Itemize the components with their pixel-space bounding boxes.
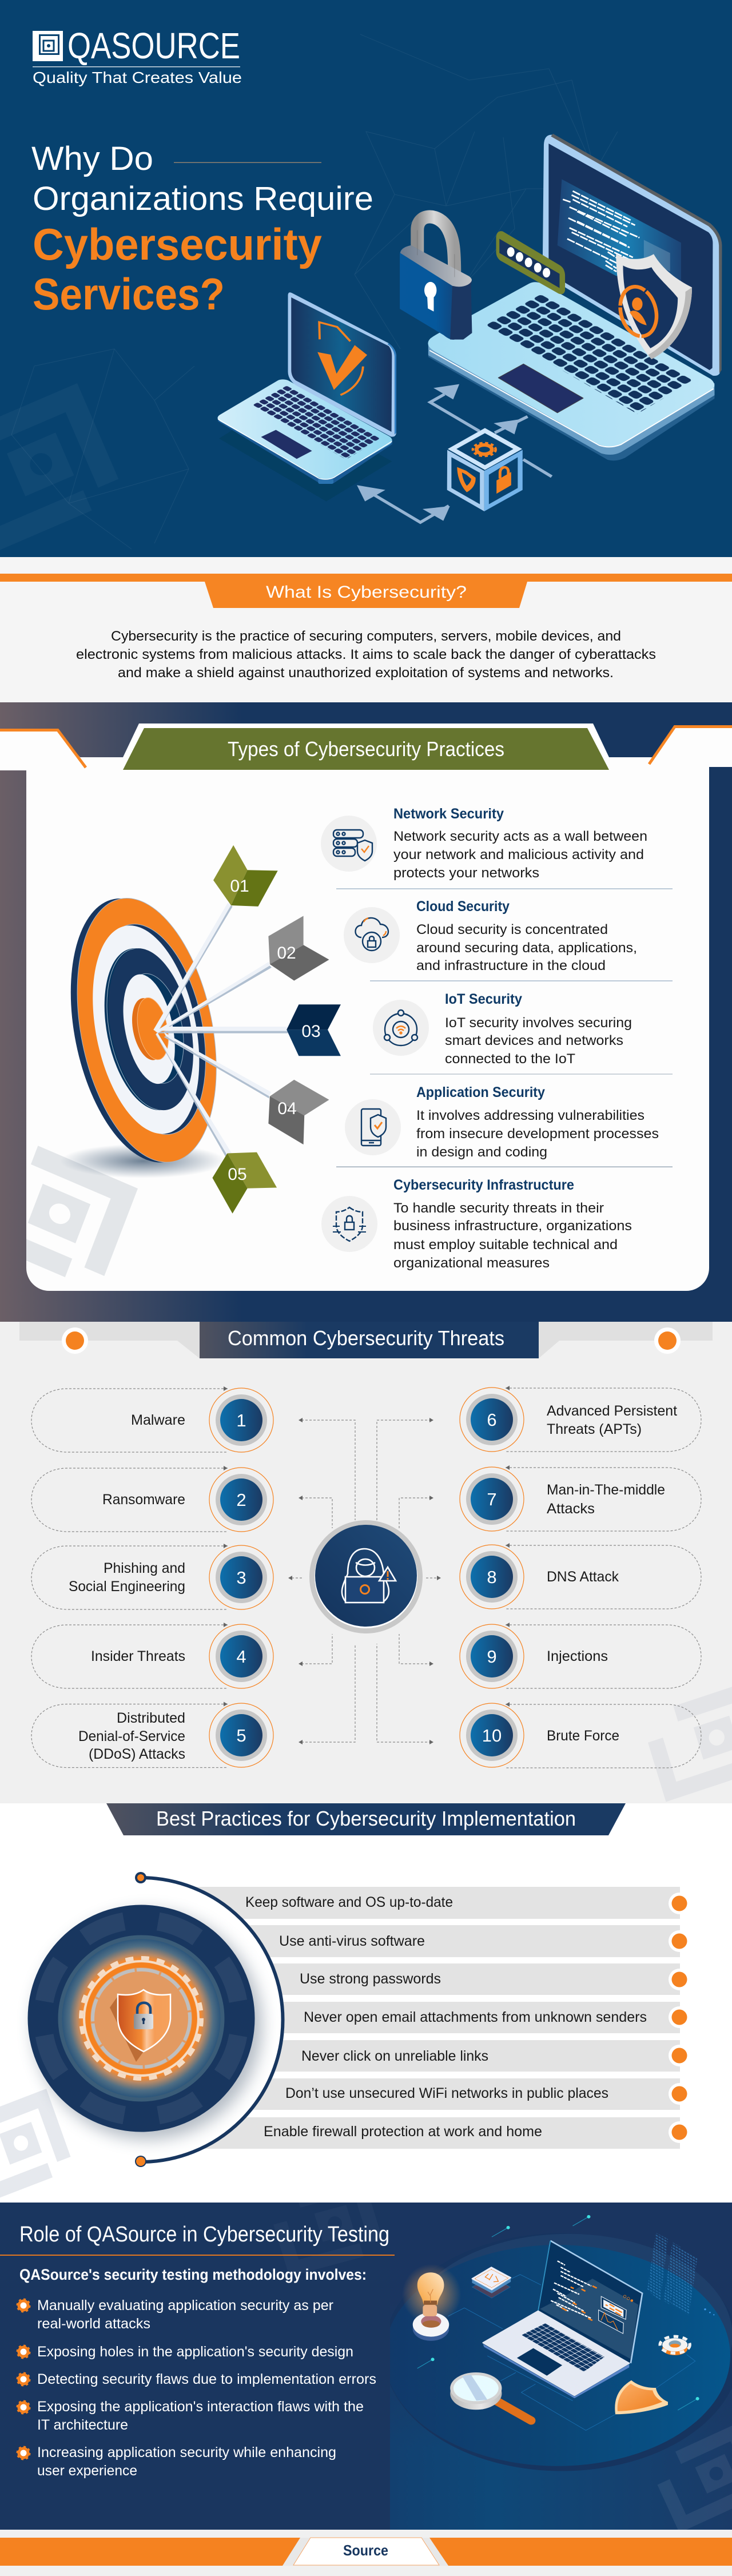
text block: cloud security <box>416 899 637 973</box>
bullet list: user experience <box>37 2463 137 2479</box>
text block: iot security: connected to the IoT <box>445 1051 575 1067</box>
text block: cloud security: Cloud Security <box>416 899 510 915</box>
definition paragraph: electronic systems from malicious attacks. It aims to scale back the danger of cyberattacks <box>76 647 656 662</box>
target shadow <box>60 1144 226 1178</box>
icon: iot security <box>373 1000 429 1056</box>
target graphic <box>50 886 288 1175</box>
light streaks <box>417 2217 698 2410</box>
practice labels: Enable firewall protection at work and home <box>264 2124 542 2140</box>
text block: cybersecurity infrastructure: must employ suitable technical and <box>393 1237 618 1253</box>
orange shield <box>615 2380 668 2414</box>
ribbon left <box>19 1322 200 1358</box>
text block: network security: Network Security <box>393 806 504 822</box>
arrow marker 05 <box>212 1152 277 1214</box>
best practices watermark logo <box>0 2089 71 2197</box>
threat 10: brute force: 10 <box>482 1726 502 1746</box>
panel: best practices <box>0 1803 732 2206</box>
definition paragraph: and make a shield against unauthorized exploitation of systems and networks. <box>118 665 614 681</box>
QASource logo <box>33 25 242 86</box>
arc white disc <box>137 1878 283 2162</box>
text block: network security: Network security acts as a wall between <box>393 829 647 844</box>
threat 5: ddos: (DDoS) Attacks <box>89 1746 185 1762</box>
number 04: 04 <box>277 1099 297 1118</box>
text block: cybersecurity infrastructure <box>393 1177 632 1271</box>
arrow marker 02 <box>268 916 329 981</box>
text block: application security <box>416 1084 659 1160</box>
threats watermark logo <box>648 1687 732 1802</box>
bullet list: IT architecture <box>37 2417 128 2433</box>
hero title: Why Do <box>31 140 153 177</box>
text block: cybersecurity infrastructure: organizational measures <box>393 1255 550 1271</box>
bullet list: real-world attacks <box>37 2316 150 2332</box>
arrow marker 03 <box>287 1004 341 1056</box>
threat 7: mitm: Attacks <box>547 1501 595 1517</box>
bullet list: Increasing application security while enhancing <box>37 2444 336 2460</box>
dot right <box>654 1327 681 1354</box>
heading tab <box>205 582 527 608</box>
footer: source: Source <box>343 2542 388 2559</box>
threat 5: ddos: Denial-of-Service <box>78 1728 185 1744</box>
threat 9: injections: Injections <box>547 1648 608 1664</box>
connector arrowheads <box>288 1418 441 1744</box>
heading tab <box>123 723 609 770</box>
small laptop <box>217 292 396 502</box>
shield emblem <box>27 1905 262 2140</box>
threat 7: mitm <box>460 1465 701 1531</box>
threat 8: dns: 8 <box>487 1567 497 1587</box>
role top shade <box>390 2203 732 2530</box>
hero panel <box>0 0 732 559</box>
hero watermark logo <box>0 383 118 550</box>
threat 7: mitm: 7 <box>487 1489 497 1509</box>
text block: iot security <box>445 991 632 1067</box>
threat 10: brute force <box>460 1702 701 1768</box>
laptop <box>483 2241 642 2398</box>
panel: common cybersecurity threats <box>0 1322 732 1803</box>
threat 2: ransomware: 2 <box>236 1490 246 1510</box>
dashed connectors <box>292 1420 438 1742</box>
panel: what is cybersecurity <box>0 557 732 702</box>
icon: network security <box>321 816 377 872</box>
icon: cloud security <box>344 907 400 963</box>
hero title: Organizations Require <box>33 180 373 217</box>
big laptop and padlock <box>400 134 722 460</box>
text block: cybersecurity infrastructure: Cybersecurity Infrastructure <box>393 1177 574 1193</box>
text block: cloud security: and infrastructure in the cloud <box>416 958 606 973</box>
hero network pattern <box>11 34 618 549</box>
text block: cybersecurity infrastructure: business infrastructure, organizations <box>393 1218 632 1234</box>
threat 6: apts: Advanced Persistent <box>547 1403 677 1419</box>
text block: iot security: IoT security involves securing <box>445 1015 632 1031</box>
threat 10: brute force: Brute Force <box>547 1728 619 1744</box>
globe backdrop <box>383 2233 732 2471</box>
panel: types of cybersecurity practices <box>0 702 732 1322</box>
heading tab: Common Cybersecurity Threats <box>228 1326 504 1350</box>
icon: cybersecurity infrastructure <box>321 1196 377 1252</box>
bullet list: Exposing the application's interaction flaws with the <box>37 2399 364 2415</box>
circular arrows <box>357 384 552 522</box>
small laptop, arrows and cube <box>217 292 552 522</box>
QASource logo: Quality That Creates Value <box>33 69 242 86</box>
threat 3: phishing <box>31 1544 273 1609</box>
password box <box>496 231 565 294</box>
practice labels: Never open email attachments from unknown senders <box>304 2009 647 2025</box>
text block: network security: your network and malicious activity and <box>393 847 644 862</box>
arrow marker 01 <box>213 845 278 907</box>
role subtitle: QASource's security testing methodology involves: <box>19 2266 367 2283</box>
heading tab <box>106 1803 626 1835</box>
threat 1: malware: 1 <box>236 1410 246 1430</box>
padlock <box>400 217 472 340</box>
bullet list: Exposing holes in the application's security design <box>37 2344 353 2360</box>
hero title <box>31 140 373 319</box>
cube with icons <box>447 428 523 511</box>
big laptop <box>428 134 722 460</box>
threat 2: ransomware <box>31 1466 273 1532</box>
bullet list: Detecting security flaws due to implementation errors <box>37 2371 376 2387</box>
practice labels <box>245 1894 647 2140</box>
definition paragraph: Cybersecurity is the practice of securing computers, servers, mobile devices, and <box>111 629 621 644</box>
dot left <box>62 1327 88 1354</box>
magnifying glass <box>450 2372 531 2420</box>
heading tab: Best Practices for Cybersecurity Implementation <box>156 1807 576 1830</box>
role illustration <box>383 2215 732 2471</box>
threat 8: dns <box>460 1543 701 1609</box>
threat 4: insider threats <box>31 1623 273 1688</box>
central hacker icon <box>309 1520 423 1633</box>
threat 7: mitm: Man-in-The-middle <box>547 1482 665 1498</box>
text block: cloud security: around securing data, applications, <box>416 940 637 956</box>
threat 9: injections: 9 <box>487 1647 497 1667</box>
arc <box>135 1872 283 2167</box>
threat 3: phishing: 3 <box>236 1568 246 1588</box>
number 02: 02 <box>277 944 296 963</box>
heading tab: What Is Cybersecurity? <box>266 583 467 602</box>
arrow marker 04 <box>268 1080 329 1144</box>
orange corner accents <box>0 730 86 768</box>
number 03: 03 <box>301 1022 321 1041</box>
ribbon right <box>539 1322 713 1358</box>
text block: network security: protects your networks <box>393 865 539 881</box>
text block: application security: It involves addressing vulnerabilities <box>416 1108 645 1123</box>
role title: Role of QASource in Cybersecurity Testing <box>19 2223 389 2247</box>
blue sparks <box>704 2308 714 2315</box>
data columns <box>647 2233 698 2315</box>
threat 5: ddos <box>31 1702 273 1767</box>
heading tab: Types of Cybersecurity Practices <box>228 737 504 761</box>
target arrow shafts <box>153 903 288 1156</box>
text block: network security <box>393 806 647 881</box>
role right watermark logo <box>658 2426 732 2530</box>
streak heads <box>431 2215 699 2400</box>
text block: application security: from insecure development processes <box>416 1126 659 1142</box>
practice labels: Keep software and OS up-to-date <box>245 1894 453 1910</box>
threat 6: apts <box>460 1386 701 1452</box>
threat 9: injections <box>460 1623 701 1688</box>
threat 4: insider threats: Insider Threats <box>91 1648 185 1664</box>
threat 5: ddos: 5 <box>236 1726 246 1746</box>
definition paragraph <box>76 629 656 681</box>
threat 6: apts: 6 <box>487 1410 497 1430</box>
text block: application security: Application Security <box>416 1084 545 1100</box>
threat 1: malware: Malware <box>131 1412 185 1428</box>
threat 1: malware <box>31 1386 273 1452</box>
footer: source <box>0 2530 732 2576</box>
bullet list: Manually evaluating application security as per <box>37 2297 333 2313</box>
hero title: Services? <box>33 269 225 319</box>
light bulb <box>402 2264 461 2341</box>
text block: iot security: IoT Security <box>445 991 522 1007</box>
text block: iot security: smart devices and networks <box>445 1033 623 1048</box>
number 05: 05 <box>228 1165 247 1184</box>
left panel watermark logo <box>266 2176 386 2276</box>
card watermark logo <box>26 1146 138 1277</box>
shield <box>615 254 692 359</box>
icon: application security <box>345 1099 401 1155</box>
practice labels: Use strong passwords <box>300 1971 441 1987</box>
card background <box>0 728 732 1291</box>
circuit outlines <box>448 2275 695 2430</box>
heading tab <box>200 1322 539 1358</box>
threat 4: insider threats: 4 <box>236 1647 246 1667</box>
bullet list <box>17 2297 376 2479</box>
practice labels: Don’t use unsecured WiFi networks in public places <box>285 2085 608 2101</box>
threat 3: phishing: Social Engineering <box>69 1579 185 1595</box>
panel: role of QASource <box>0 2176 732 2533</box>
text block: application security: in design and coding <box>416 1144 547 1160</box>
practice bars <box>172 1887 680 2149</box>
bar end dots <box>669 1893 690 2143</box>
practice labels: Never click on unreliable links <box>301 2048 488 2064</box>
text block: cybersecurity infrastructure: To handle security threats in their <box>393 1200 604 1216</box>
code block icon <box>472 2267 511 2298</box>
threat 5: ddos: Distributed <box>117 1710 185 1726</box>
threat 6: apts: Threats (APTs) <box>547 1421 642 1437</box>
gear icon <box>660 2336 690 2355</box>
hero title: Cybersecurity <box>33 219 322 269</box>
practice labels: Use anti-virus software <box>279 1933 425 1949</box>
threat 3: phishing: Phishing and <box>104 1560 185 1576</box>
text block: cloud security: Cloud security is concentrated <box>416 922 608 937</box>
threat 2: ransomware: Ransomware <box>102 1492 185 1508</box>
number 01: 01 <box>230 877 249 896</box>
left panel <box>0 2176 395 2530</box>
QASource logo: QASOURCE <box>67 25 240 66</box>
threat 8: dns: DNS Attack <box>547 1569 619 1585</box>
